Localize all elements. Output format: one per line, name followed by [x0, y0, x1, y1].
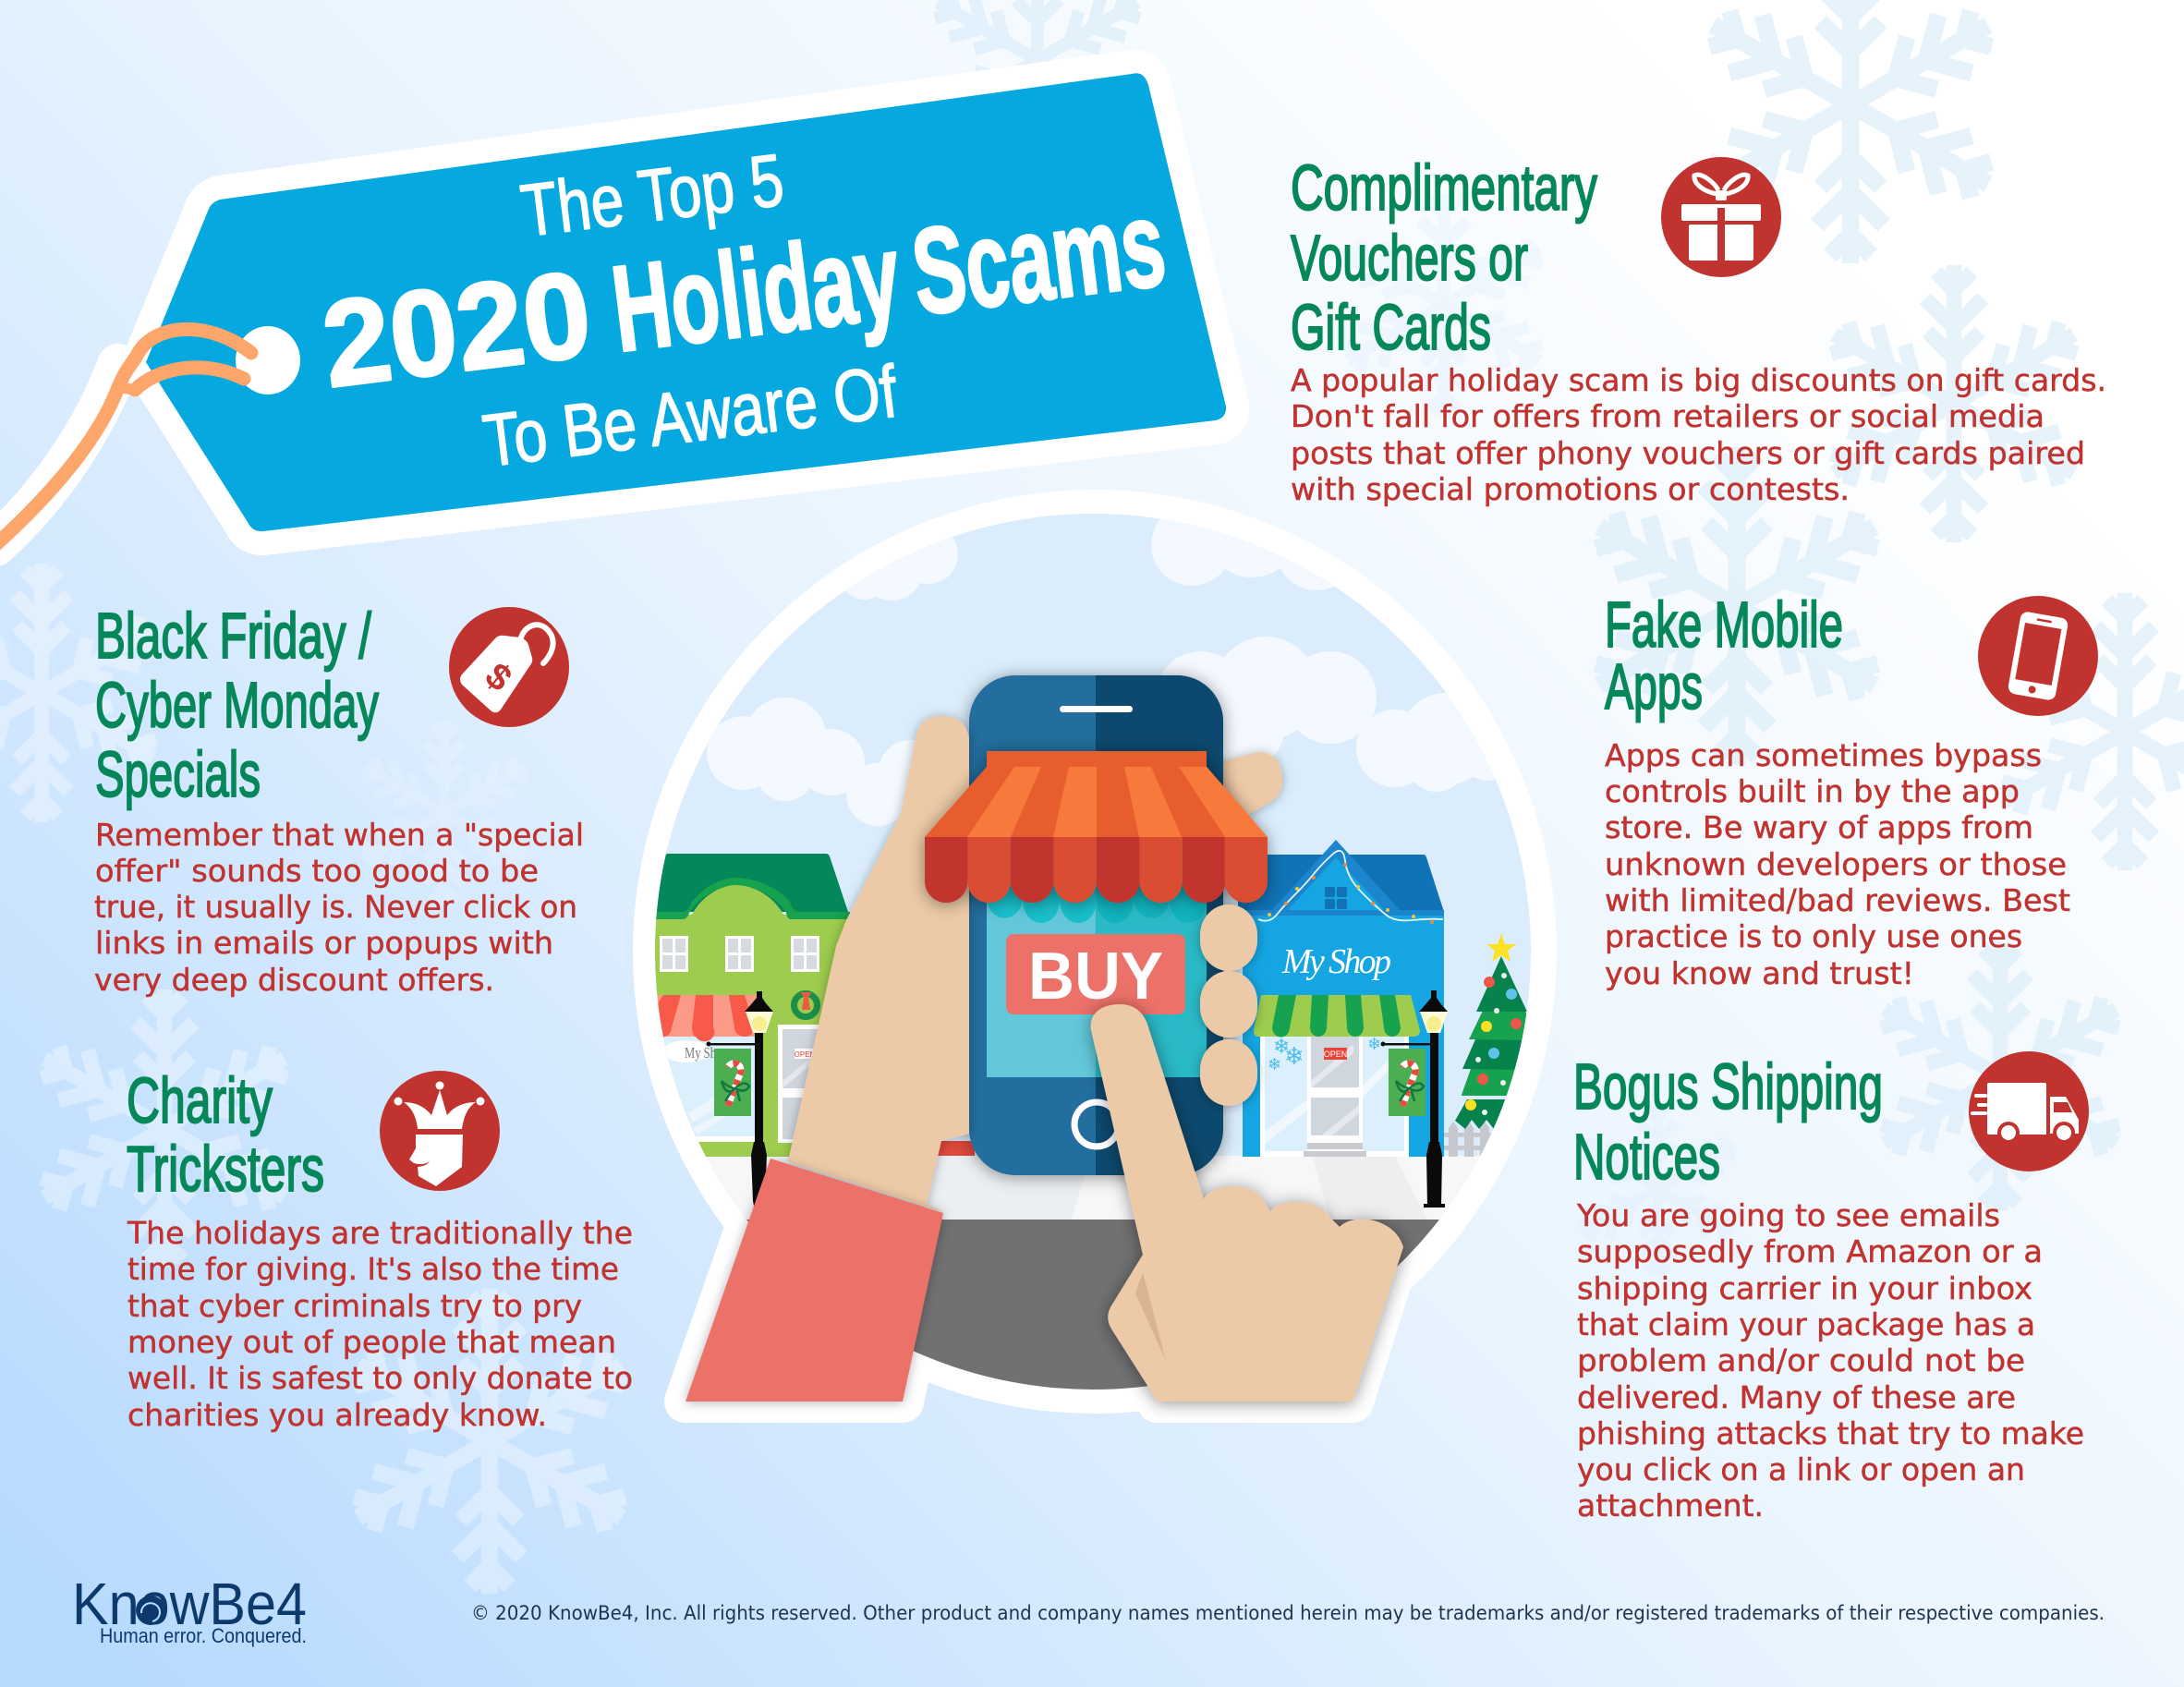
sign: [662, 1040, 716, 1062]
icon: price tag: $: [478, 655, 519, 699]
body text: you click on a link or open an: [1577, 1451, 2025, 1487]
body text: that claim your package has a: [1577, 1306, 2035, 1342]
heading: Black Friday /: [95, 600, 371, 672]
thumb crease: [1135, 1272, 1166, 1361]
body text: [94, 817, 584, 998]
heading: Vouchers or: [1291, 222, 1528, 294]
body text: well. It is safest to only donate to: [127, 1360, 633, 1396]
storefront: ❄: [1273, 1036, 1290, 1059]
green awning: [1254, 995, 1420, 1038]
storefront: ❄: [1367, 1035, 1381, 1054]
heading: Gift Cards: [1291, 291, 1491, 363]
heading: [95, 600, 379, 810]
body text: very deep discount offers.: [94, 962, 494, 998]
heading: Tricksters: [127, 1133, 324, 1205]
body text: charities you already know.: [127, 1397, 547, 1433]
body text: [127, 1215, 633, 1433]
shop window: [663, 1037, 755, 1136]
body text: practice is to only use ones: [1605, 918, 2022, 954]
banner with candy cane: [714, 1049, 751, 1116]
panel: bogus shipping notices: [1573, 1050, 2089, 1523]
body text: with special promotions or contests.: [1291, 471, 1850, 507]
arched wall: [692, 885, 783, 915]
door: OPEN: [795, 1050, 816, 1059]
body text: attachment.: [1577, 1487, 1764, 1523]
right street lamp: [1380, 990, 1448, 1208]
icon: gift: [1661, 157, 1781, 277]
title tag: [0, 73, 1226, 545]
title line: To Be Aware Of: To Be Aware Of: [479, 350, 902, 482]
copyright footer: © 2020 KnowBe4, Inc. All rights reserved. Other product and company names mentioned herein may be trademarks and/or registered trademarks of their respective companies.: [471, 1602, 2105, 1624]
body text: phishing attacks that try to make: [1577, 1415, 2084, 1451]
heading: Cyber Monday: [95, 669, 379, 741]
body text: that cyber criminals try to pry: [127, 1288, 582, 1324]
body text: You are going to see emails: [1576, 1197, 2000, 1233]
door: [778, 1025, 819, 1143]
tag shape: [146, 74, 1225, 531]
fence: [1444, 1122, 1536, 1157]
body text: The holidays are traditionally the: [127, 1215, 633, 1251]
left hand palm: [788, 716, 969, 1212]
panel: complimentary vouchers: [1291, 152, 2106, 507]
snow globe illustration: [628, 485, 1557, 1414]
body text: with limited/bad reviews. Best: [1605, 882, 2070, 918]
logo: KnowBe4: Human error. Conquered.: [100, 1624, 307, 1647]
body text: Remember that when a "special: [95, 817, 584, 853]
awning: [652, 995, 762, 1041]
sidewalk: [706, 1156, 1480, 1220]
title line: 2020 Holiday Scams: Holiday: [605, 207, 907, 377]
icon: delivery truck: [1969, 1051, 2089, 1171]
title line: The Top 5: The Top 5: [516, 139, 788, 252]
banner with candy cane: [1389, 1049, 1426, 1116]
logo: KnowBe4: KnowBe4: [72, 1571, 307, 1637]
body text: unknown developers or those: [1605, 846, 2067, 882]
heading: Specials: [95, 738, 261, 810]
body text: supposedly from Amazon or a: [1577, 1233, 2043, 1269]
body text: Don't fall for offers from retailers or social media: [1291, 398, 2044, 434]
body text: shipping carrier in your inbox: [1577, 1270, 2032, 1306]
screen scallops: [987, 831, 1207, 923]
heading: [1291, 152, 1597, 363]
shop awning: [925, 751, 1268, 903]
storefront: ❄: [1268, 1055, 1281, 1074]
red storefront strip: [933, 1141, 975, 1156]
body text: [1605, 737, 2070, 991]
title text: [315, 139, 1172, 482]
body text: time for giving. It's also the time: [127, 1251, 619, 1287]
heading: [1573, 1050, 1883, 1193]
string casing: [0, 365, 118, 545]
right building: [1238, 840, 1444, 1157]
left building: [651, 854, 859, 1157]
left hand fingers: [1200, 904, 1257, 1106]
screen: [987, 831, 1096, 1077]
body text: A popular holiday scam is big discounts on gift cards.: [1291, 362, 2106, 398]
sky: [628, 499, 1552, 1220]
clouds: [707, 519, 1495, 826]
heading: Complimentary: [1291, 152, 1597, 224]
phone: [969, 675, 1223, 1175]
body text: problem and/or could not be: [1577, 1342, 2025, 1378]
BUY button: BUY: [1028, 940, 1163, 1013]
speaker: [1060, 706, 1133, 712]
globe white outline: [633, 490, 1557, 1414]
tag fill: [146, 73, 1226, 531]
body text: Apps can sometimes bypass: [1605, 737, 2042, 773]
christmas tree: [1455, 934, 1534, 1129]
body text: controls built in by the app: [1605, 773, 2020, 809]
attic window: [1325, 887, 1347, 909]
shop name: My Shop: [1281, 942, 1391, 981]
body text: money out of people that mean: [127, 1324, 616, 1360]
storefront: OPEN: [1324, 1050, 1347, 1059]
title line: 2020 Holiday Scams: Scams: [905, 175, 1172, 340]
road: [746, 1220, 1439, 1390]
sign: My Sh: [685, 1044, 716, 1062]
pointing hand: [1091, 1004, 1403, 1402]
heading: [127, 1064, 324, 1205]
heading: Apps: [1605, 650, 1703, 722]
body text: store. Be wary of apps from: [1605, 809, 2033, 845]
heading: Bogus Shipping: [1573, 1050, 1883, 1123]
body text: you know and trust!: [1605, 955, 1914, 991]
windows: [660, 936, 819, 972]
string lights: [1258, 851, 1443, 924]
title line: 2020 Holiday Scams: 2020: [315, 246, 598, 413]
home button: [1074, 1102, 1119, 1147]
body text: [1576, 1197, 2084, 1523]
icon: price tag: [449, 607, 569, 727]
body text: true, it usually is. Never click on: [94, 889, 577, 925]
body text: offer" sounds too good to be: [95, 853, 539, 889]
panel: charity tricksters: [127, 1064, 633, 1433]
body text: posts that offer phony vouchers or gift cards paired: [1291, 435, 2085, 471]
storefront: ❄: [1284, 1043, 1304, 1071]
panel: black friday: [94, 600, 584, 998]
left street lamp: [706, 991, 773, 1229]
back of left hand finger: [1219, 752, 1282, 831]
heading: Notices: [1573, 1121, 1720, 1193]
heading: Fake Mobile: [1605, 589, 1843, 661]
storefront: [1260, 1035, 1409, 1157]
icon: mobile phone: [1978, 596, 2098, 716]
heading: [1605, 589, 1843, 722]
globe scene: [628, 485, 1552, 1404]
body text: [1291, 362, 2106, 507]
panel: fake mobile apps: [1605, 589, 2098, 991]
body text: delivered. Many of these are: [1577, 1379, 2016, 1415]
orange string: [0, 329, 251, 545]
sleeve: [686, 1159, 943, 1402]
icon: jester: [380, 1071, 500, 1191]
title line: 2020 Holiday Scams: [315, 175, 1172, 413]
tag hole: [236, 326, 300, 394]
wreath: [795, 992, 817, 1016]
body text: links in emails or popups with: [95, 925, 553, 961]
heading: Charity: [127, 1064, 273, 1136]
